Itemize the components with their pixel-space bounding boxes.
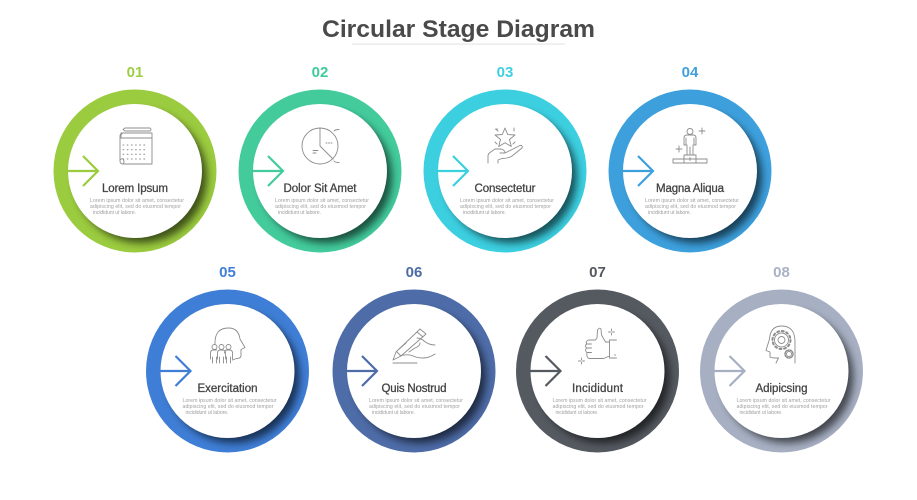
description 07 (552, 398, 647, 416)
description 06: Lorem ipsum dolor sit amet, consectetur (369, 398, 463, 404)
description 08: incididunt ut labore. (740, 410, 782, 416)
number 05: 05 (219, 264, 236, 281)
description 08: Lorem ipsum dolor sit amet, consectetur (736, 398, 831, 404)
description 03 (460, 198, 554, 216)
description 06: incididunt ut labore. (372, 410, 415, 416)
ring 03 (424, 90, 586, 252)
heading 01: Lorem Ipsum (102, 183, 168, 195)
number 07: 07 (589, 264, 606, 281)
description 01: adipiscing elit, sed do eiusmod tempor (90, 204, 181, 210)
description 02: incididunt ut labore. (278, 210, 321, 216)
description 03: incididunt ut labore. (463, 210, 506, 216)
panel: stage 06 (332, 264, 496, 452)
icon: pie chart (302, 128, 339, 164)
number 01: 01 (127, 64, 143, 81)
arrow 06 (347, 356, 377, 386)
description 04: Lorem ipsum dolor sit amet, consectetur (645, 198, 739, 204)
ring 06 (332, 290, 496, 452)
description 03: Lorem ipsum dolor sit amet, consectetur (460, 198, 554, 204)
description 05: adipiscing elit, sed do eiusmod tempor (182, 404, 274, 410)
title: Circular Stage Diagram (322, 16, 595, 43)
heading 07: Incididunt (572, 383, 624, 395)
description 04: incididunt ut labore. (648, 210, 691, 216)
description 07: Lorem ipsum dolor sit amet, consectetur (552, 398, 647, 404)
description 01 (90, 198, 184, 216)
icon: hand writing with pen (393, 329, 435, 363)
number 06: 06 (406, 264, 422, 281)
icon: head with gears (766, 326, 795, 363)
heading 08: Adipicsing (756, 383, 808, 395)
number 02: 02 (312, 64, 328, 81)
description 05: incididunt ut labore. (186, 410, 228, 416)
heading 02: Dolor Sit Amet (284, 183, 357, 195)
heading 03: Consectetur (474, 183, 536, 195)
description 06: adipiscing elit, sed do eiusmod tempor (369, 404, 460, 410)
ring 01 (54, 90, 216, 252)
heading 05: Exercitation (198, 383, 258, 395)
ring 02 (238, 90, 402, 252)
arrow 03 (438, 156, 468, 186)
description 01: Lorem ipsum dolor sit amet, consectetur (90, 198, 184, 204)
panel: stage 01 (54, 64, 216, 252)
description 07: incididunt ut labore. (556, 410, 598, 416)
icon: head with people (210, 328, 245, 363)
description 07: adipiscing elit, sed do eiusmod tempor (552, 404, 644, 410)
panel: stage 05 (146, 264, 309, 452)
panel: stage 02 (238, 64, 402, 252)
description 02 (275, 198, 369, 216)
number 04: 04 (682, 64, 699, 81)
panel: stage 08 (700, 264, 863, 452)
icon: person on podium (673, 128, 707, 163)
arrow 04 (623, 156, 653, 186)
arrow 08 (714, 356, 744, 386)
panel: stage 04 (608, 64, 772, 252)
description 05 (182, 398, 277, 416)
ring 07 (516, 290, 679, 452)
heading 04: Magna Aliqua (656, 183, 725, 195)
arrow 02 (253, 156, 283, 186)
arrow 05 (160, 356, 190, 386)
description 03: adipiscing elit, sed do eiusmod tempor (460, 204, 551, 210)
icon: calendar (120, 128, 152, 164)
number 03: 03 (497, 64, 513, 81)
description 02: Lorem ipsum dolor sit amet, consectetur (275, 198, 369, 204)
panel: stage 07 (516, 264, 679, 452)
description 05: Lorem ipsum dolor sit amet, consectetur (182, 398, 277, 404)
description 08 (736, 398, 831, 416)
icon: thumbs up (578, 328, 616, 364)
heading 06: Quis Nostrud (382, 383, 446, 395)
panel: stage 03 (424, 64, 586, 252)
ring 05 (146, 290, 309, 452)
icon: star over hand (488, 128, 522, 163)
arrow 01 (68, 156, 98, 186)
ring 04 (608, 90, 772, 252)
number 08: 08 (773, 264, 790, 281)
arrow 07 (530, 356, 560, 386)
description 04: adipiscing elit, sed do eiusmod tempor (645, 204, 736, 210)
ring 08 (700, 290, 863, 452)
description 04 (645, 198, 739, 216)
description 06 (369, 398, 463, 416)
description 08: adipiscing elit, sed do eiusmod tempor (736, 404, 828, 410)
description 01: incididunt ut labore. (93, 210, 136, 216)
description 02: adipiscing elit, sed do eiusmod tempor (275, 204, 366, 210)
